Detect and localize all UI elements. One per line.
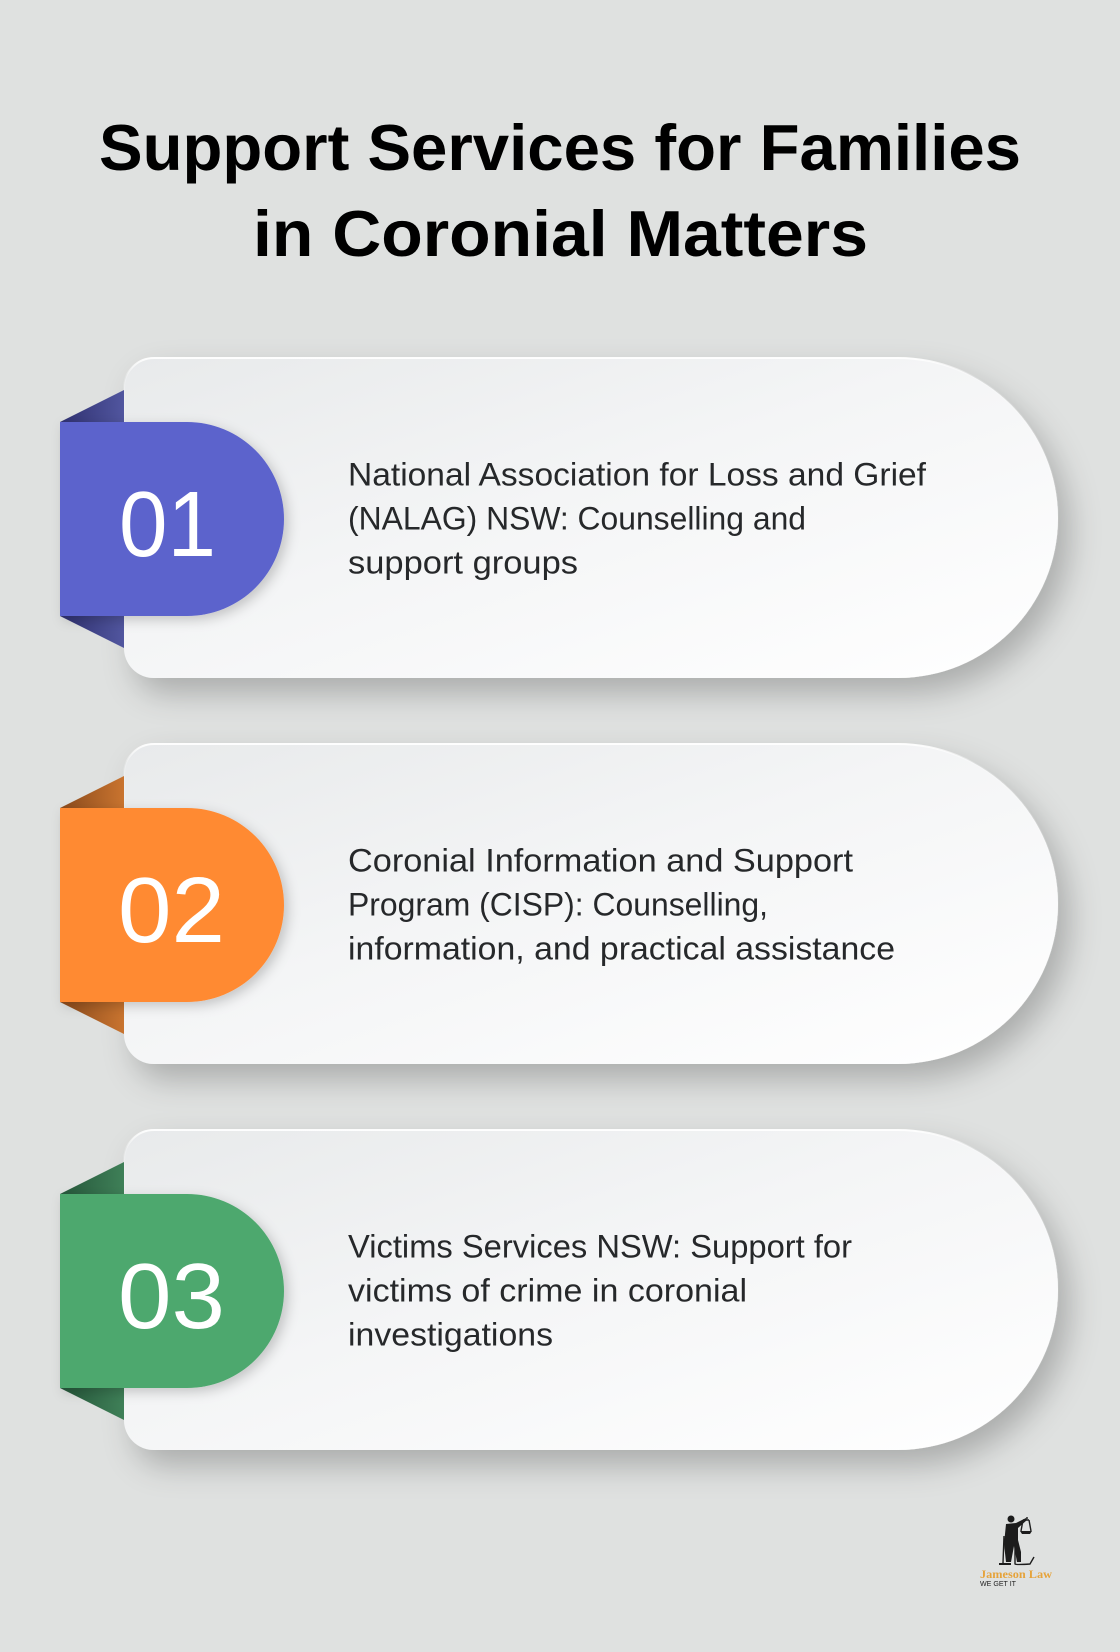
number 03: 03 [118,1244,225,1348]
text 01: National Association for Loss and Grief [348,456,926,492]
card 01 [124,358,1058,678]
text 03: victims of crime in coronial [348,1272,747,1308]
text 01: support groups [348,544,578,580]
panel: item 02 [60,744,1058,1064]
number tab 01 [60,422,284,616]
title: in Coronial Matters [253,197,868,270]
text 01 [348,456,926,580]
title: Support Services for Families [99,111,1021,184]
text 03 [348,1228,852,1352]
logo name: Jameson Law [980,1567,1052,1581]
icon: lady justice [999,1516,1034,1565]
text 01: (NALAG) NSW: Counselling and [348,500,806,536]
number tab 02 [60,808,284,1002]
text 03: Victims Services NSW: Support for [348,1228,852,1264]
text 03: investigations [348,1316,553,1352]
number 02: 02 [118,858,225,962]
text 02 [348,842,895,966]
number 01: 01 [119,472,216,576]
card 03 [124,1130,1058,1450]
card 02 [124,744,1058,1064]
text 02: Coronial Information and Support [348,842,853,878]
text 02: information, and practical assistance [348,930,895,966]
logo tagline: WE GET IT [980,1579,1016,1588]
number tab 03 [60,1194,284,1388]
ribbon folds 02 [60,776,124,1034]
ribbon folds 03 [60,1162,124,1420]
logo: Jameson Law [980,1516,1052,1588]
panel: item 03 [60,1130,1058,1450]
panel: item 01 [60,358,1058,678]
ribbon folds 01 [60,390,124,648]
title [99,111,1021,270]
text 02: Program (CISP): Counselling, [348,886,768,922]
